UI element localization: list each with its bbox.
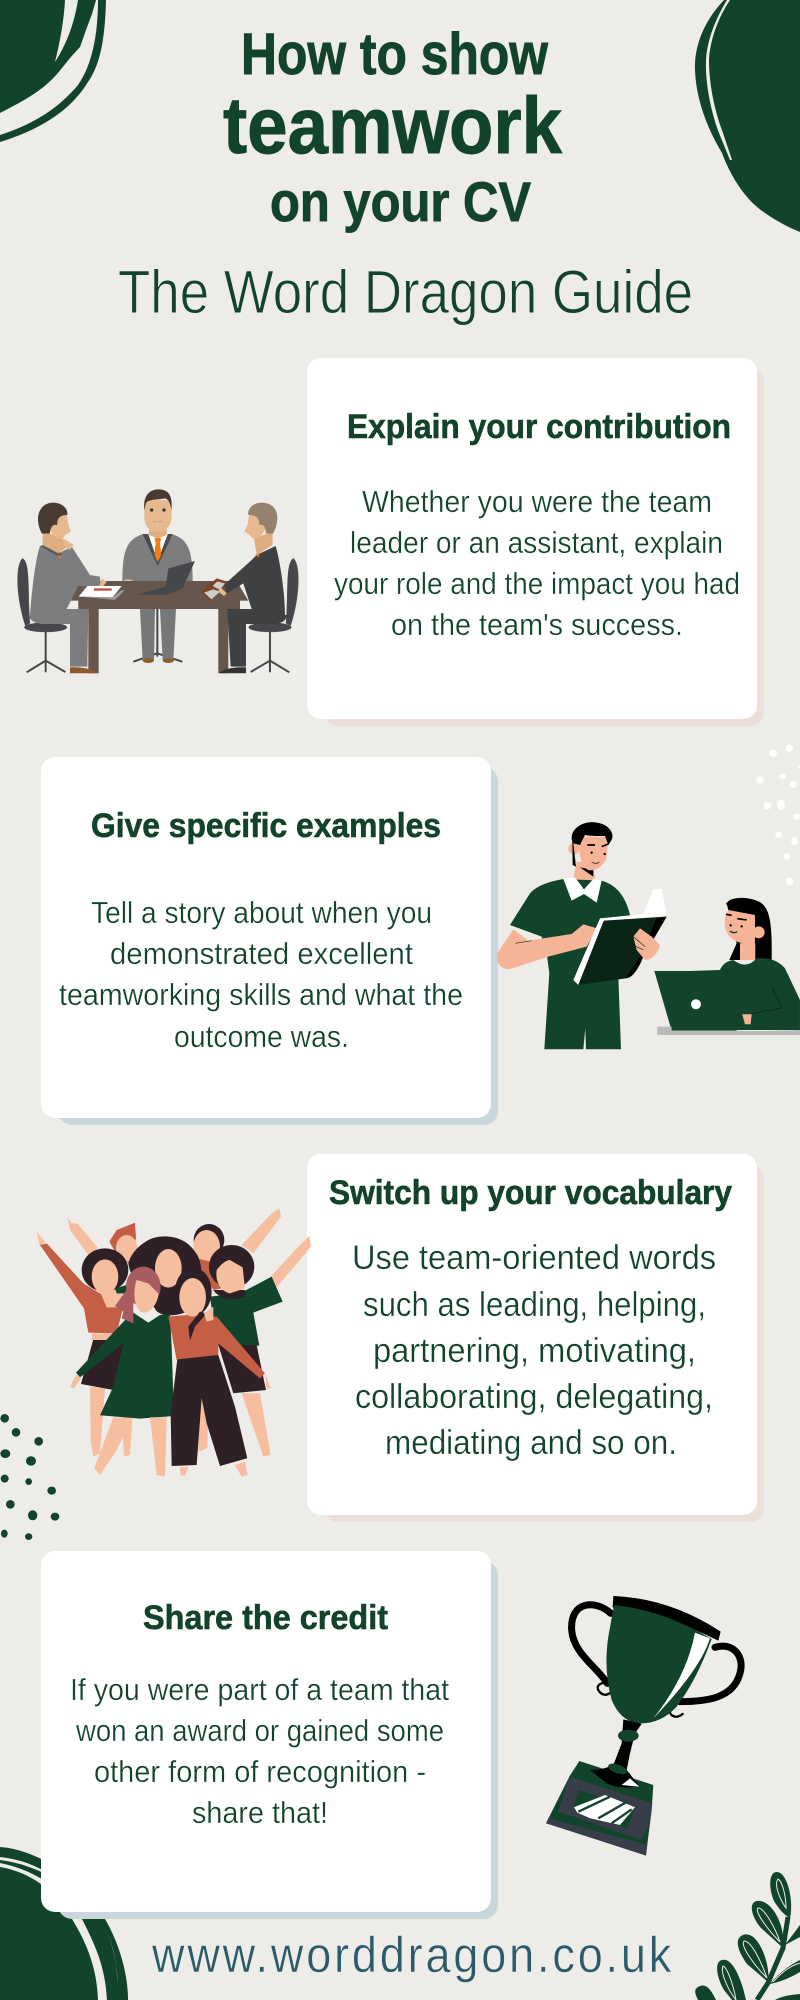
panel: share the credit — [41, 1551, 498, 1919]
decorative blob: top right — [695, 0, 800, 232]
body text: give specific examples — [59, 895, 463, 1054]
illustration: trophy — [546, 1596, 741, 1856]
title: How to show — [241, 22, 549, 87]
heading: share the credit: Share the credit — [143, 1599, 388, 1637]
website url: www.worddragon.co.uk — [151, 1928, 672, 1984]
body text: share the credit: share that! — [192, 1795, 328, 1830]
body text: explain your contribution: your role and the impact you had — [334, 566, 740, 601]
body text: explain your contribution — [334, 484, 740, 642]
panel: switch up your vocabulary — [307, 1154, 764, 1522]
body text: switch up your vocabulary: partnering, motivating, — [373, 1332, 696, 1370]
decorative green dots — [0, 1414, 59, 1540]
body text: explain your contribution: on the team's success. — [391, 607, 683, 642]
body text: switch up your vocabulary: such as leading, helping, — [363, 1286, 706, 1324]
man — [497, 822, 667, 1049]
body text: switch up your vocabulary: collaborating, delegating, — [355, 1378, 713, 1416]
title: on your CV — [270, 170, 531, 233]
body text: explain your contribution: leader or an assistant, explain — [350, 525, 723, 560]
woman — [654, 898, 800, 1035]
body text: share the credit: other form of recognition - — [94, 1754, 426, 1789]
title — [223, 22, 562, 233]
panel: explain your contribution — [307, 358, 764, 726]
body text: share the credit — [70, 1672, 449, 1830]
heading: explain your contribution: Explain your contribution — [347, 408, 731, 446]
body text: give specific examples: teamworking skills and what the — [59, 977, 463, 1012]
body text: share the credit: If you were part of a team that — [70, 1672, 449, 1707]
body text: share the credit: won an award or gained some — [75, 1713, 444, 1748]
body text: switch up your vocabulary — [352, 1239, 716, 1462]
panel: give specific examples — [41, 757, 498, 1125]
title: teamwork — [223, 81, 562, 170]
body text: give specific examples: outcome was. — [174, 1019, 349, 1054]
body text: switch up your vocabulary: mediating and so on. — [385, 1424, 677, 1462]
illustration: group of friends cheering — [37, 1208, 311, 1477]
decorative blob: bottom left — [0, 1847, 128, 2000]
decorative blob: top left — [0, 0, 106, 142]
heading: switch up your vocabulary: Switch up your vocabulary — [329, 1174, 732, 1212]
body text: give specific examples: Tell a story about when you — [91, 895, 432, 930]
body text: explain your contribution: Whether you were the team — [362, 484, 712, 519]
body text: give specific examples: demonstrated excellent — [110, 936, 413, 971]
decorative leaf branch: bottom right — [695, 1872, 800, 2000]
decorative white dots — [756, 745, 800, 886]
body text: switch up your vocabulary: Use team-oriented words — [352, 1239, 716, 1277]
heading: give specific examples: Give specific examples — [91, 807, 441, 845]
illustration: three businessmen at a table — [18, 489, 298, 673]
illustration: man with book and woman at laptop — [497, 822, 800, 1049]
subtitle: The Word Dragon Guide — [118, 258, 693, 326]
